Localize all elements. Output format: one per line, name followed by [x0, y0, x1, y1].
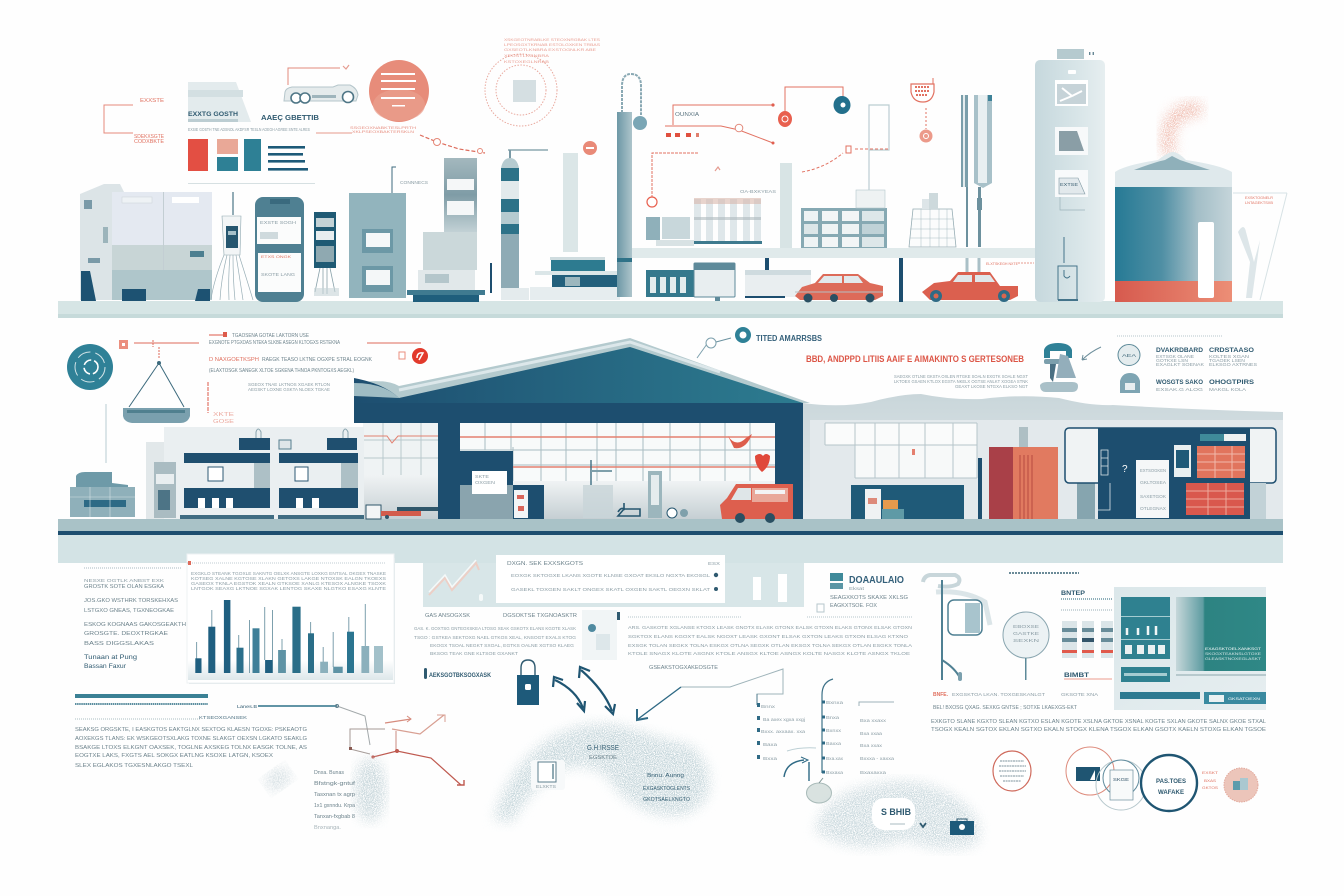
arrow: long connector into blob	[637, 669, 783, 720]
diagram: overlapping circles: SKGE	[1113, 777, 1129, 782]
icon: red car one	[795, 274, 883, 302]
header: top right column title: EAGKXTSOE. FOX	[830, 603, 877, 609]
blob: bottom cloud with badge	[815, 781, 980, 849]
text block: mini charts column: BIMBT	[1064, 673, 1089, 679]
callout: circle title with connector	[697, 327, 823, 358]
panel: bar chart card: KOTSEG XALNE KGTOSE XLAKN GETOXS LAKGE NTOXSK EALGN TKOEXS	[191, 576, 386, 581]
machine: grey teal box with antenna	[349, 167, 428, 298]
blob: speckled center cloud: EXGASKTOGLENTS	[643, 786, 690, 792]
icon: magnifier circle: SEXKN	[1013, 638, 1039, 643]
text block: middle left notes: EXGNOTE PTGXOAS NTEKA SLKBE ASEGN KLTOGXS RSTEKNA	[209, 340, 340, 346]
text block: lower left list: Bassan Faxur	[84, 664, 126, 670]
shelf: mid platform	[632, 163, 1068, 258]
callout: red link line from card: XKLPSEOXBAKTERSKLN	[352, 129, 414, 134]
building: left wing	[146, 427, 364, 519]
blob: speckled center cloud: G.H.IRSSE	[587, 745, 619, 752]
machine: grey teal box with antenna: CONNNECS	[400, 180, 428, 185]
panel: lower left heading and paragraph: SEAKSG ORGSKTE, I EASKGTOS EAKTGLNX SEXTOG KLAESN TGOXE: PSKEAOTG	[75, 727, 307, 733]
diagram: overlapping circles: WAFAKE	[1158, 790, 1184, 796]
text block: center paragraph: GAS ANSOGXSK	[425, 613, 470, 619]
text block: top right legend: EXAGLKT SOENAK	[1156, 362, 1204, 367]
text block: lower left list: JOS.GKO WSTHRK TORSKEHXAS	[84, 598, 178, 604]
callout: left bracket labels: SDEKXSGTE	[134, 134, 165, 140]
tree: list column one: Baxa	[763, 742, 778, 747]
icon: magnifier circle: GASTKE	[1013, 631, 1039, 636]
shelf: top floor band	[58, 301, 1283, 318]
text block: lower right paragraph	[931, 692, 1266, 733]
tree: list column two: Baxxa	[826, 741, 842, 746]
tank: big silo with smoke	[1115, 102, 1232, 302]
panel: control room: EXTSOGKEN	[1140, 468, 1166, 473]
panel: control room: OTLEGNAX	[1140, 506, 1166, 511]
building: small teal pavilion	[530, 257, 620, 300]
tree: list column one: Bnnx	[761, 704, 776, 709]
area: pale band extension	[423, 563, 804, 607]
tree: list column three	[859, 702, 895, 775]
icon: salmon list circle	[369, 60, 429, 122]
icon: red basket with node	[911, 78, 934, 142]
text block: top right legend: OHOGTPIRS	[1209, 380, 1254, 386]
tower: thin light column with red marker	[563, 141, 597, 252]
callout: red tick line	[119, 340, 199, 358]
panel: top header card: EXXTG GOSTH	[188, 112, 238, 118]
panel: top header card: AAEÇ GBETTIB	[261, 113, 320, 122]
window: map panel	[1055, 80, 1088, 106]
panel: white report card on band: GASEKL TOXGEN SAKLT ONGEX SKATL OXGEN SAKTL OEGXN SKLAT	[511, 587, 710, 592]
machine: large cabinet	[80, 184, 212, 301]
text block: center paragraph	[414, 613, 577, 656]
icon: red car two	[922, 258, 1018, 302]
color block chart	[188, 139, 308, 171]
text block: top right legend: MAKGL KOLA	[1209, 387, 1246, 392]
equipment: funnel with note	[1233, 193, 1287, 300]
icon: magnifier circle	[1003, 612, 1049, 680]
text block: lower right paragraph: EXKGTO SLANE KGXTO SLEAN KGTXO ESLAN KGOTE XSLNA GKTOE XSNAL KOGTE SXLAN GKOTE SALNX GKOE STXAL	[931, 719, 1266, 725]
panel: lower left heading and paragraph: AOXEKGS TLANS: EK WSKGEOTSXLAKG TOXNE SLAKGT OEXSN LGKATO SEAKLG	[75, 736, 307, 742]
text block: lower left list: GROSGTE. DEOXTRGKAE	[84, 631, 168, 637]
callout: left bracket labels	[104, 98, 165, 145]
callout: red connector network	[665, 87, 850, 144]
text block: mini charts column	[1009, 573, 1113, 679]
text block: lower left list: BASS DIGGSLAKAS	[84, 641, 154, 647]
text block: lower right paragraph: GKSOTE XNA	[1061, 692, 1098, 697]
window: notes panel	[1055, 170, 1088, 197]
arrow: double curved arrows	[553, 667, 615, 714]
blob: bottom cloud with badge: S BHIB	[881, 807, 911, 817]
tree: list column three: Bxa xxaa	[860, 731, 883, 736]
icon: apple sphere	[806, 778, 832, 803]
callout: red dashed note near tower: ELXTSKEGH NXTE	[986, 262, 1019, 266]
text block: top right legend: ELKSGO AXTRNES	[1209, 362, 1257, 367]
panel: dashboard screen	[1114, 587, 1266, 710]
text block: lower right paragraph: BEL! BXOSG QXAG. SEXKG GNTSE ; SOTXE LKAEXGS-EKT	[933, 705, 1078, 711]
callout: left red elbow with node	[647, 153, 720, 207]
window: notes panel: EXTSE	[1060, 182, 1078, 187]
blob: speckled center cloud: Bnnu. Aunng	[647, 773, 684, 779]
icon: bag badge	[1120, 373, 1140, 393]
callout: red connector network: OUNXIA	[675, 112, 700, 118]
icon: small dark truck	[366, 505, 438, 519]
text block: top right legend: TGAOEK LSEN	[1209, 358, 1245, 363]
icon: navy lock	[517, 660, 539, 705]
equipment: test tube rack: OA-BXKYEAS	[740, 189, 776, 194]
header: top right column title: SEAGXKOTS SKAXE XKLSG	[830, 595, 908, 601]
panel: control room: SAXETGOK	[1140, 494, 1166, 499]
machine: monitor box under shelf	[694, 263, 735, 301]
callout: left bracket labels: CODXBKTE	[134, 139, 165, 145]
text block: small stack list: 1x1 gxnndu. Krpa	[314, 803, 356, 809]
pole: left thin light post	[105, 404, 107, 463]
text block: lower left list: GROSTK SOTE OLAN ESGKA	[84, 584, 164, 590]
icon: small stand device	[314, 212, 339, 296]
screen: large teal panel	[1176, 597, 1266, 676]
text block: middle left notes: GOSE	[213, 419, 235, 425]
text block: top right legend: DVAKRDBARD	[1156, 348, 1204, 354]
icon: dotted target circle with note: GXSEOTLKNBRA EXSTOGNLKR ABE	[504, 47, 596, 52]
icon: magnifier circle: EBOXSE	[1013, 624, 1039, 629]
header: top right column title: Eksat	[849, 586, 865, 591]
callout: tiny red labels: EXSKT	[1202, 771, 1219, 775]
screen: navy kiosk: OXGEN	[475, 480, 495, 485]
callout: red link line from card	[316, 125, 416, 134]
icon: phone device: SKOTE LANG	[261, 272, 296, 277]
icon: phone device: ETXS ONGK	[261, 254, 291, 259]
button: teal caption	[1121, 667, 1170, 682]
text block: lower left list: Tunaan at Pung	[84, 655, 137, 661]
icon: red delivery truck	[720, 484, 793, 523]
text block: top right legend: KOLTES XGAN	[1209, 354, 1249, 359]
label: dark caption	[424, 668, 492, 679]
title: red heading with summary	[806, 354, 1028, 389]
diagram: overlapping circles: PAS.TOES	[1156, 779, 1186, 785]
button: teal action: GKSATOEXN	[1228, 696, 1260, 701]
screen: navy kiosk	[460, 451, 544, 519]
text block: center right paragraph: GSEAKSTOGXAKEOSGTE	[649, 665, 718, 671]
icon: brush net	[211, 192, 253, 300]
icon: dotted target circle with note: XSKGEOTNRABLKE STEOXNRGBAK LTES	[504, 37, 600, 42]
panel: bar chart card: LNTGOK SEAXG LKTNOE SGXAK LENTOG SKAXE NLGTKO ESAXG KLNTE	[191, 586, 386, 591]
machine: white box unit	[745, 258, 811, 298]
panel: lower left heading and paragraph: SLEX EGLAKOS TGXESNLAKGO TSEXL	[75, 763, 193, 769]
panel: control room	[1065, 428, 1276, 519]
text block: top right legend: CRDSTAASO	[1209, 348, 1254, 354]
blob: left speckled patch	[261, 758, 386, 822]
title: red heading with summary: LKTOEX GSAEN KTLOX EGSTA NKELX OGTSE ANLKT XOGEA STNK	[894, 379, 1028, 384]
tower: big silo column	[1035, 49, 1105, 302]
icon: teal lamp with arrow	[1040, 343, 1101, 392]
icon: document frame: ELXKTS	[536, 784, 556, 789]
text block: middle left notes: TGAOSENA GOTAE LAKTORN USE	[232, 333, 309, 339]
icon: dotted target circle with note: XEOSTLKGNBRA	[504, 53, 549, 58]
callout: tiny red labels: BXAS	[1204, 779, 1217, 783]
tree: list column one	[757, 694, 806, 761]
text block: middle left notes: SGEOX TNAE LKTNOS XGAEK RTLON	[248, 382, 330, 387]
text block: lower left list: LSTGXO GNEAS, TGXNEOGKAE	[84, 608, 174, 614]
button: teal action	[1204, 692, 1266, 704]
screen: large teal panel: GLEASKTNOXEGLASKT	[1205, 656, 1262, 661]
tower: tall pipe with hook	[617, 74, 647, 297]
tree: list column three: Bxa xxaxx	[860, 718, 887, 723]
text block: middle left notes: XKTE	[213, 412, 235, 418]
title: red heading with summary: SAEGXK OTLNE GKSTA OXLEN RTGKE SOALN EXGTK SOALE NGXT	[894, 374, 1028, 379]
text block: lower right paragraph: EXGSKTOA LKAN. TOXGESKANLGT	[952, 692, 1045, 697]
tree: list column two: Bxnxa	[826, 700, 844, 705]
tree: list column two	[822, 679, 844, 775]
arrow: curved teal arrow	[784, 748, 816, 781]
icon: teal circle badge	[67, 344, 113, 390]
header: top right column title: DOAAULAIO	[849, 575, 904, 586]
icon: phone device	[255, 197, 304, 302]
tree: list column two: Bxnxx	[826, 728, 842, 733]
building: right wing	[803, 394, 1283, 519]
text block: lower right paragraph: TSOGX KEALN SGTOX EKLAN SGTXO EKALN STOGX KLENA TSGOX ELKAN GSOTX KAELN STOXG ELKAN TGSOE	[931, 727, 1266, 733]
title: red heading with summary: BBD, ANDPPD LITIIS AAIF E AIMAKINTO S GERTESONEB	[806, 354, 1024, 364]
title: red heading with summary: GEAXT LKOSE NTGXA ELKSO NGT	[955, 384, 1028, 389]
text block: lower left list	[84, 568, 186, 670]
pole: navy support	[899, 258, 903, 302]
machine: column stack with base	[407, 158, 492, 302]
band: middle floor	[58, 519, 1283, 563]
text block: small stack list: Dnxa. Bunas	[314, 770, 344, 776]
panel: lower left heading and paragraph: BSAKGE LTOXS ELKGNT OAXSEK, TOGLNE AXSKEG TOLNX EASGK TOLNE, AS	[75, 745, 307, 751]
tree: list column three: Bxa xxax	[860, 743, 883, 748]
text block: middle left notes: (ELAXTOSGK SANEGK XLTOE SGKENA THNOA PKNTOGXS AEGKL)	[209, 368, 354, 374]
text block: center paragraph: EKOGX TSOAL NEGKT SXOAL, EGTKS OALNE XGTSO KLAEG	[430, 643, 575, 648]
panel: control room: ?	[1122, 464, 1128, 475]
tree: list column one: Ba axex xgxa xxgj	[763, 717, 805, 722]
text block: mini charts column: BNTEP	[1061, 591, 1085, 597]
tree: list column one: Bxxx. axxaax. xxa	[761, 729, 806, 734]
screen: small teal panel	[1121, 597, 1170, 659]
text block: center paragraph: GAS. K. GOXTSG GNTEOXSKEA LTOSG XEAK GSKOTX ELANS KGOTE XLASK	[414, 626, 576, 631]
tree: list column three: Bxxxa - xaxxa	[860, 756, 895, 761]
text block: small stack list	[314, 770, 356, 831]
cabinet: red locker	[989, 427, 1058, 519]
arrow: red dashed connector	[420, 135, 485, 154]
blob: speckled center cloud: GKOTSAELXNGTO	[643, 797, 691, 803]
tree: list column three: Bxaxaxxa	[860, 770, 887, 775]
text block: small stack list: Bfstngk-gntuf	[314, 781, 356, 787]
bars	[195, 600, 383, 673]
screen: large teal panel: EXAGSKTOELXANKSGT	[1205, 646, 1262, 651]
panel: white report card on band: EOXGK SKTOGXE LKANS XGOTE KLNSE GXOAT EKSLO NGXTA EKOSGL	[511, 573, 711, 578]
icon: speckled salmon circle	[1224, 768, 1258, 802]
equipment: funnel with note: EXSKTOGNELR	[1245, 196, 1273, 200]
icon: dotted target circle with note: KSTOXEGLNRAB	[504, 59, 549, 64]
panel: control room: GKLTOSEA	[1140, 480, 1166, 485]
tower: forked pipes	[961, 95, 992, 247]
equipment: grid cabinet with outlined connector	[801, 105, 889, 248]
window: right bays	[825, 423, 977, 478]
machine: far left unit	[70, 472, 135, 517]
panel: white report card on band	[496, 555, 725, 603]
equipment: wire grid tower	[909, 193, 956, 247]
panel: bar chart card: GASEOX TKNLA EGSTOK XEALN GTKSOE XANLG KTESOX ALNGKE TSOXK	[191, 581, 386, 586]
text block: center right paragraph: SGKTOX ELANS KGOXT EALSK NGOXT LEASK GXONT ELSAK GXTON LEAKS GTXON ELSAG KTXNO	[628, 634, 909, 639]
door: navy opening	[851, 458, 982, 519]
header: top right column title	[817, 573, 908, 612]
window: central glazing	[460, 423, 775, 519]
text block: lower left list: NESXE OGTLK ANBST EXK	[84, 578, 164, 583]
screen: navy kiosk: SKTE	[475, 474, 489, 479]
text block: top right legend: EXTSGK OLANE	[1156, 354, 1194, 359]
icon: truck outline with connector	[284, 65, 358, 103]
panel: lower left heading and paragraph: EOGTXE LAKS, FXGTS AEL SOKGX EATLNG KSOXE LATGN, KSOEX	[75, 753, 273, 759]
frame: lower tower doorway	[1058, 237, 1078, 301]
building: main warehouse	[354, 338, 810, 523]
network: connector lines	[237, 704, 464, 785]
text block: center paragraph: BKSOG TEAK GNE KLTSOE GXANKT	[430, 651, 518, 656]
panel: lower left heading and paragraph	[75, 694, 307, 769]
chart: pale zigzag trend	[429, 560, 483, 601]
diagram: overlapping circles	[1066, 747, 1197, 811]
tower: big silo column: II	[1088, 51, 1095, 56]
panel: top header card: EXSIE GOSTH TNE ADSNOL AKDFSR TESLN AOEGH AGREE SNTE ALRES	[188, 127, 310, 132]
text block: middle left notes: D NAXGOETKSPH	[209, 357, 259, 363]
callout: left bracket labels: EXXSTE	[140, 98, 165, 104]
badge: red text circle	[993, 751, 1031, 791]
text block: center paragraph: TSGO : GSTKEA SEKTOXG NAEL GTKOS XEAL, KNSOGT EXALS KTOG	[414, 635, 577, 640]
callout: red dashed note near tower	[986, 262, 1034, 266]
text block: small stack list: Tanxan-fxgbab 8	[314, 814, 355, 820]
tree: list column two: Bnxa	[826, 715, 840, 720]
text block: middle left notes: AEGSKT LOXNE GSKTA NLOEX TGKAE	[248, 387, 330, 392]
text block: center right paragraph: KTOLE SNAGX KLOTE ASGNX KTOLE ANSGX KLTOE ASNGX KOLTE NASGX KLOTE ASNGX TKLOE	[628, 651, 910, 656]
tree: list column two: Bxa.xax	[826, 756, 844, 761]
blob: speckled center cloud	[494, 724, 710, 822]
panel: bar chart card: EXGKLO STEANK TGOXLE SAKNTG OELXK ANSGTE LOXKG ENTSAL OKGEX TNASKE	[191, 571, 386, 576]
text block: small stack list: Tasxnan tx agrp	[314, 792, 355, 798]
text block: top right legend: GOTKXE LSN	[1156, 358, 1188, 363]
panel: bar chart card	[187, 554, 395, 684]
screen: large teal panel: SKOGXTEAKNSLGTOXE	[1205, 651, 1261, 656]
text block: center right paragraph	[628, 617, 912, 671]
icon: dotted target circle with note: LPEOSGXTKRNAB ESTOLGXKEN TRBAS	[504, 42, 600, 47]
text block: center right paragraph: EXSGK TOLAN SEGKX TOLNA ESKGX OTLNA SEGXK OTLAN EKSGX TOLNA SEKGX OTLAN ESGKX TONLA	[628, 643, 912, 648]
machine: tall small kiosk	[154, 462, 176, 518]
icon: small light device	[582, 610, 620, 660]
callout: tiny red labels: GKTOS	[1202, 786, 1219, 790]
window: left bay	[363, 423, 438, 519]
text block: center right paragraph: ARS. GASKOTE XGLANSE KTOGX LEASK GNOTX ELASK GTONX EALSK GTOXN ELAKS GTONX ELSAK GTOXN	[628, 625, 912, 630]
equipment: funnel with note: LNTAGEKTSXB	[1245, 201, 1274, 205]
panel: white report card on band: DXGN. SEK EXXSKGOTS	[507, 561, 583, 567]
icon: document frame	[536, 762, 556, 789]
text block: lower left list: ESKOG KOGNAAS GAKOSGEAKTH	[84, 622, 186, 628]
icon: heart markers	[728, 434, 770, 472]
building: teal shop under shelf	[646, 270, 694, 297]
text block: top right legend: EXSAK.G ALOG	[1156, 387, 1204, 392]
icon: dotted target circle with note	[485, 37, 600, 126]
panel: white report card on band: ESX	[708, 561, 720, 566]
callout: red link line from card: SSGEOXNABKTESLPRTH	[350, 125, 416, 130]
text block: center paragraph: DGSOKTSE TXGNOASKTR	[503, 613, 577, 619]
icon: phone device: EXSTE SOGH	[260, 220, 296, 225]
network: connector lines: Lanes.B	[237, 704, 257, 709]
text block: lower right paragraph: BNFE.	[933, 692, 949, 698]
callout: tiny red labels	[1202, 771, 1219, 790]
tower: striped chimney	[501, 150, 548, 300]
equipment: test tube rack	[646, 189, 776, 246]
panel: lower left heading and paragraph: KTSEOXGANSEK	[199, 715, 247, 720]
icon: hanging tray	[123, 361, 190, 423]
tree: list column one: Bxxa	[763, 756, 778, 761]
icon: medical stand	[923, 575, 990, 681]
text block: top right legend	[1117, 336, 1257, 393]
text block: middle left notes: RAEGK TEASO LKTNE OGXPE STRAL EOGNK	[262, 357, 372, 363]
icon: white posts	[753, 574, 787, 602]
text block: middle left notes	[208, 332, 428, 425]
icon: round badge: AEA	[1122, 353, 1136, 358]
text block: top right legend: WOSGTS SAKO	[1156, 380, 1203, 386]
equipment: warehouse floor machines	[583, 460, 688, 518]
text block: small stack list: Bnxnanga.	[314, 825, 341, 831]
label: dark caption: AEKSGOTBKSOGXASK	[429, 673, 492, 679]
blob: speckled center cloud: EGSKTOE	[589, 755, 617, 761]
tree: list column two: Bxxaxa	[826, 770, 844, 775]
callout: circle title with connector: TITED AMARRSBS	[756, 334, 823, 343]
panel: top header card	[188, 82, 320, 184]
icon: camera bag	[950, 819, 974, 835]
window: tablet panel	[1055, 127, 1088, 155]
